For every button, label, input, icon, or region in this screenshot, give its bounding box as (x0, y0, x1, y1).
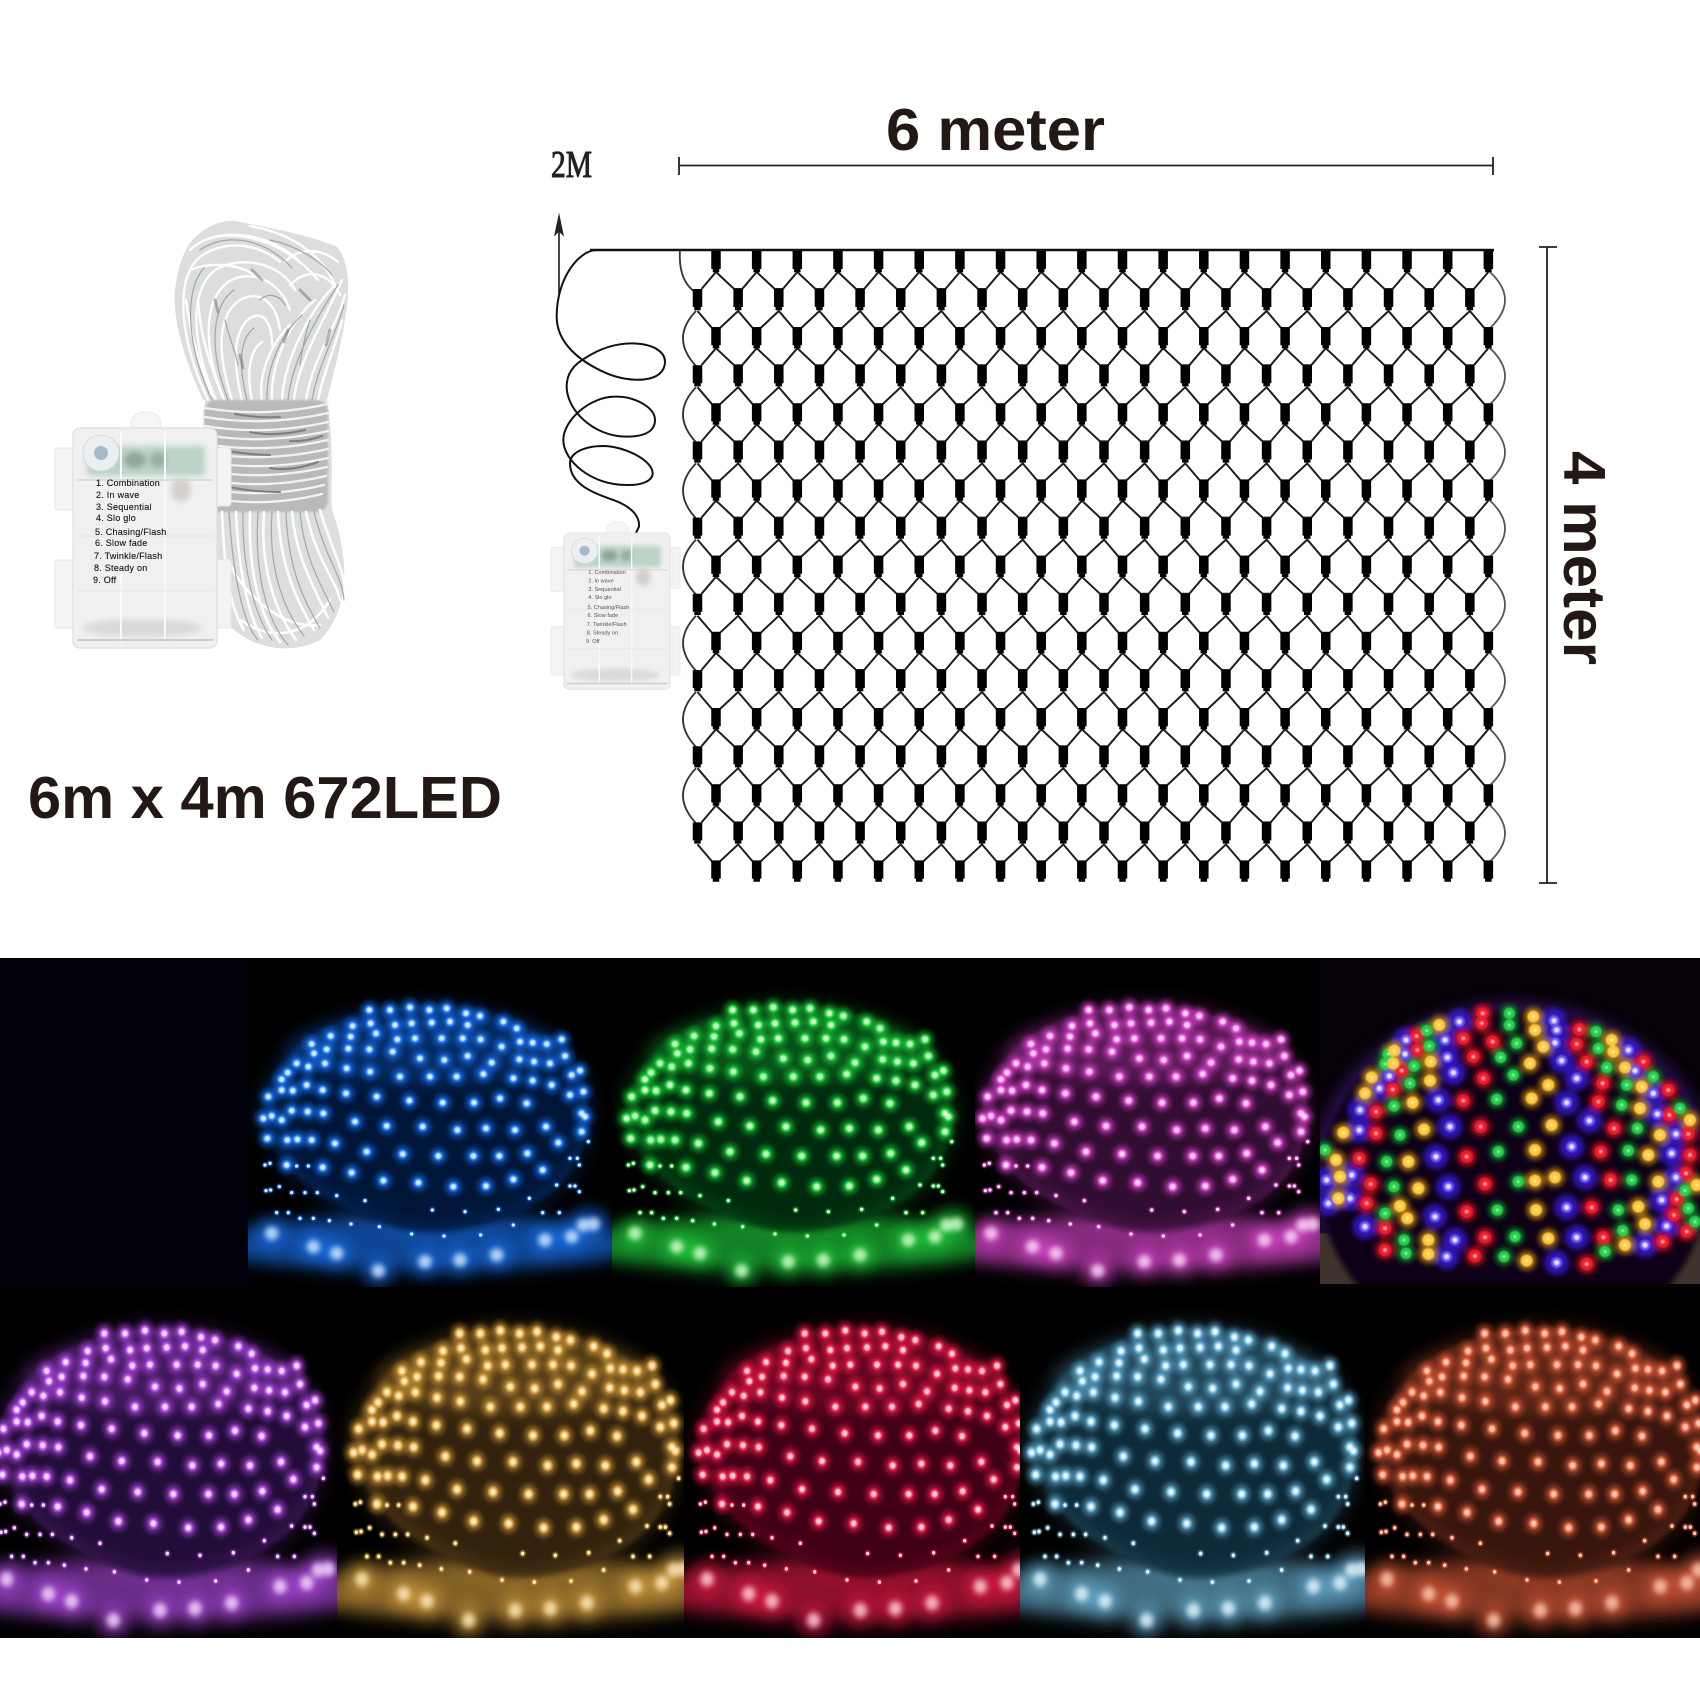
icon: battery box with modes list (55, 412, 231, 648)
photo: light blue net light (1020, 1315, 1365, 1638)
photo: multicolour net light (1320, 988, 1700, 1284)
arrow: lead wire upward (554, 213, 564, 295)
panel: night photos (0, 958, 1700, 1641)
text: mode list: 1. Combination (96, 478, 160, 488)
text: mode list: 7. Twinkle/Flash (94, 551, 162, 561)
photo: blue net light (248, 992, 612, 1287)
text: small mode list: 6. Slow fade (588, 613, 618, 619)
photo: magenta net light (975, 993, 1320, 1287)
text: small mode list: 3. Sequential (588, 587, 621, 593)
label: height 4 meter: 4 meter (1551, 451, 1617, 665)
diagram: LED net (590, 250, 1505, 880)
text: small mode list: 1. Combination (588, 570, 626, 576)
text: mode list: 4. Slo glo (96, 513, 136, 523)
photo: gold net light (337, 1315, 684, 1638)
label: width 6 meter: 6 meter (886, 97, 1105, 163)
text: small mode list (586, 570, 629, 645)
text: mode list: 2. In wave (96, 490, 140, 500)
lead wire cord (557, 250, 680, 535)
text: small mode list: 9. Off (586, 639, 600, 645)
icon: small battery box (551, 522, 680, 689)
photo: green net light (612, 994, 975, 1287)
photo: red net light (684, 1314, 1020, 1638)
text: small mode list: 8. Steady on (587, 631, 618, 636)
text: mode list (93, 478, 167, 585)
label: 2M lead wire: 2M (551, 144, 592, 186)
text: small mode list: 7. Twinkle/Flash (587, 622, 627, 628)
text: small mode list: 5. Chasing/Flash (588, 605, 629, 611)
icon: coiled silver wire bundle (175, 221, 348, 648)
dimension line: width (679, 157, 1493, 175)
text: small mode list: 2. In wave (588, 579, 614, 585)
text: small mode list: 4. Slo glo (588, 595, 612, 601)
dimension line: height (1539, 247, 1557, 883)
text: mode list: 5. Chasing/Flash (95, 527, 167, 537)
label: product size: 6m x 4m 672LED (28, 765, 502, 831)
photo: orange net light (1365, 1315, 1700, 1638)
text: mode list: 8. Steady on (94, 563, 148, 573)
text: mode list: 6. Slow fade (95, 538, 148, 548)
text: mode list: 9. Off (93, 575, 117, 585)
text: mode list: 3. Sequential (96, 502, 152, 512)
photo: purple net light (0, 1315, 337, 1638)
